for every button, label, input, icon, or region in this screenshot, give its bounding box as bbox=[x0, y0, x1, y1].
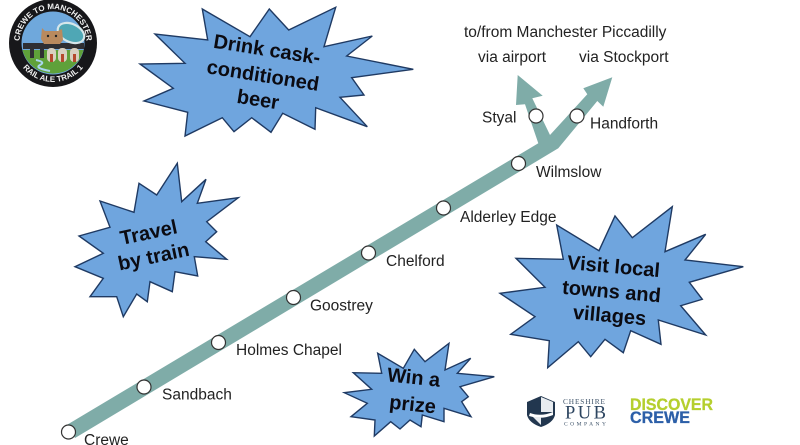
burst: win a prize bbox=[344, 343, 494, 436]
station: Sandbach: Sandbach bbox=[162, 386, 232, 404]
burst: visit local towns and villages bbox=[500, 207, 743, 368]
station: Alderley Edge: Alderley Edge bbox=[460, 209, 557, 226]
logo: Crewe to Manchester Rail Ale Trail badge: CREWE TO MANCHESTER bbox=[14, 4, 92, 41]
burst: travel by train: by train bbox=[116, 239, 191, 275]
station: Alderley Edge bbox=[436, 201, 557, 226]
burst: visit local towns and villages: villages bbox=[572, 302, 647, 330]
destination heading: to/from Manchester Piccadilly bbox=[464, 24, 667, 41]
burst: travel by train: Travel bbox=[118, 216, 179, 250]
logo: Discover Crewe bbox=[630, 395, 713, 427]
station: Holmes Chapel: Holmes Chapel bbox=[236, 342, 342, 359]
station: Styal: Styal bbox=[482, 110, 516, 126]
burst: visit local towns and villages: Visit local bbox=[566, 252, 661, 282]
station: Chelford: Chelford bbox=[386, 253, 445, 270]
logo: Crewe to Manchester Rail Ale Trail badge bbox=[9, 0, 97, 87]
station: Chelford bbox=[362, 246, 445, 270]
station: Sandbach bbox=[137, 380, 232, 404]
burst: drink cask-conditioned beer: beer bbox=[235, 86, 281, 114]
station: Handforth bbox=[570, 109, 658, 132]
burst: visit local towns and villages: towns and bbox=[561, 277, 662, 307]
burst: drink cask-conditioned beer bbox=[140, 7, 413, 136]
station: Goostrey: Goostrey bbox=[310, 298, 373, 314]
station: Wilmslow: Wilmslow bbox=[536, 164, 602, 181]
logo: Crewe to Manchester Rail Ale Trail badge: RAIL ALE TRAIL 1 bbox=[23, 64, 84, 82]
burst: drink cask-conditioned beer: conditioned bbox=[205, 56, 321, 96]
logo: Discover Crewe: CREWE bbox=[630, 408, 690, 427]
logo: Cheshire Pub Company: PUB bbox=[565, 404, 606, 424]
station: Crewe bbox=[62, 425, 129, 445]
logo: Discover Crewe: DISCOVER bbox=[630, 395, 713, 414]
branch label: via airport: via airport bbox=[478, 49, 547, 66]
burst: travel by train bbox=[75, 163, 238, 317]
station: Holmes Chapel bbox=[212, 336, 342, 359]
rail line with branching arrows bbox=[67, 75, 612, 438]
burst: win a prize: Win a bbox=[386, 364, 442, 392]
branch label: via Stockport: via Stockport bbox=[579, 49, 669, 66]
station: Styal bbox=[482, 109, 543, 126]
burst: win a prize: prize bbox=[388, 392, 437, 418]
station: Handforth: Handforth bbox=[590, 116, 658, 132]
logo: Cheshire Pub Company: COMPANY bbox=[564, 422, 606, 428]
logo: Cheshire Pub Company bbox=[527, 396, 606, 428]
logo: Cheshire Pub Company: CHESHIRE bbox=[563, 397, 606, 406]
station: Goostrey bbox=[286, 290, 373, 314]
station: Wilmslow bbox=[512, 156, 602, 181]
burst: drink cask-conditioned beer: Drink cask- bbox=[212, 31, 322, 69]
